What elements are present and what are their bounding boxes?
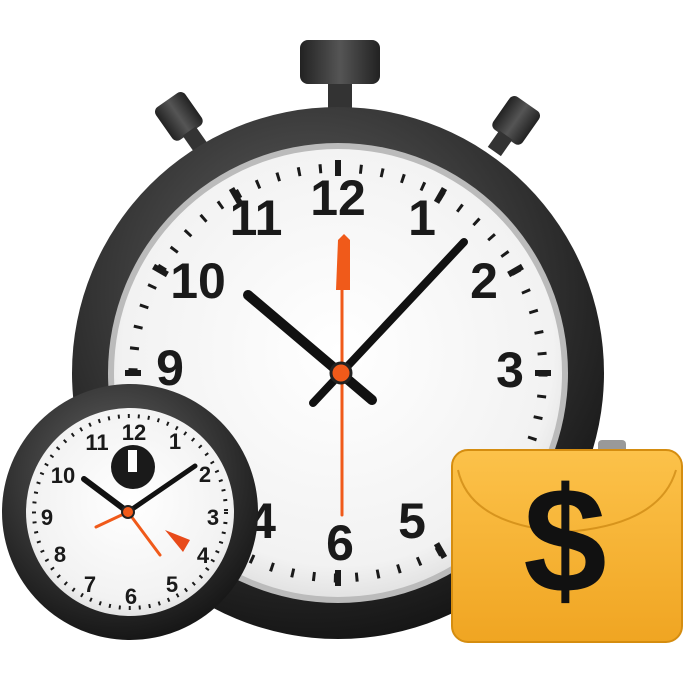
dial numbers xyxy=(156,170,524,571)
stopwatch side buttons xyxy=(153,90,542,162)
dollar sign: $ xyxy=(523,456,607,624)
small dial numbers: 10 xyxy=(51,463,75,488)
dial numbers: 9 xyxy=(156,340,184,396)
small dial numbers: 7 xyxy=(84,572,96,597)
small dial numbers xyxy=(41,420,219,609)
dial numbers: 12 xyxy=(310,170,366,226)
small dial numbers: 9 xyxy=(41,505,53,530)
dial numbers: 3 xyxy=(496,342,524,398)
small dial numbers: 5 xyxy=(166,572,178,597)
small clock xyxy=(2,384,258,640)
dial numbers: 1 xyxy=(408,190,436,246)
dial numbers: 10 xyxy=(170,253,226,309)
small dial numbers: 11 xyxy=(85,430,109,455)
small dial numbers: 4 xyxy=(197,543,210,568)
dial numbers: 5 xyxy=(398,493,426,549)
money wallet xyxy=(452,440,682,642)
small dial numbers: 8 xyxy=(54,542,66,567)
dial numbers: 6 xyxy=(326,515,354,571)
big stopwatch xyxy=(72,107,604,639)
clock hands xyxy=(248,234,464,515)
small dial numbers: 1 xyxy=(169,429,181,454)
small dial numbers: 12 xyxy=(122,420,146,445)
small dial numbers: 6 xyxy=(125,584,137,609)
dial numbers: 4 xyxy=(248,493,276,549)
small dial numbers: 2 xyxy=(199,462,211,487)
dial numbers: 11 xyxy=(230,190,282,246)
small clock hands xyxy=(84,466,195,555)
dial numbers: 2 xyxy=(470,253,498,309)
small dial numbers: 3 xyxy=(207,505,219,530)
stopwatch crown xyxy=(300,40,380,110)
